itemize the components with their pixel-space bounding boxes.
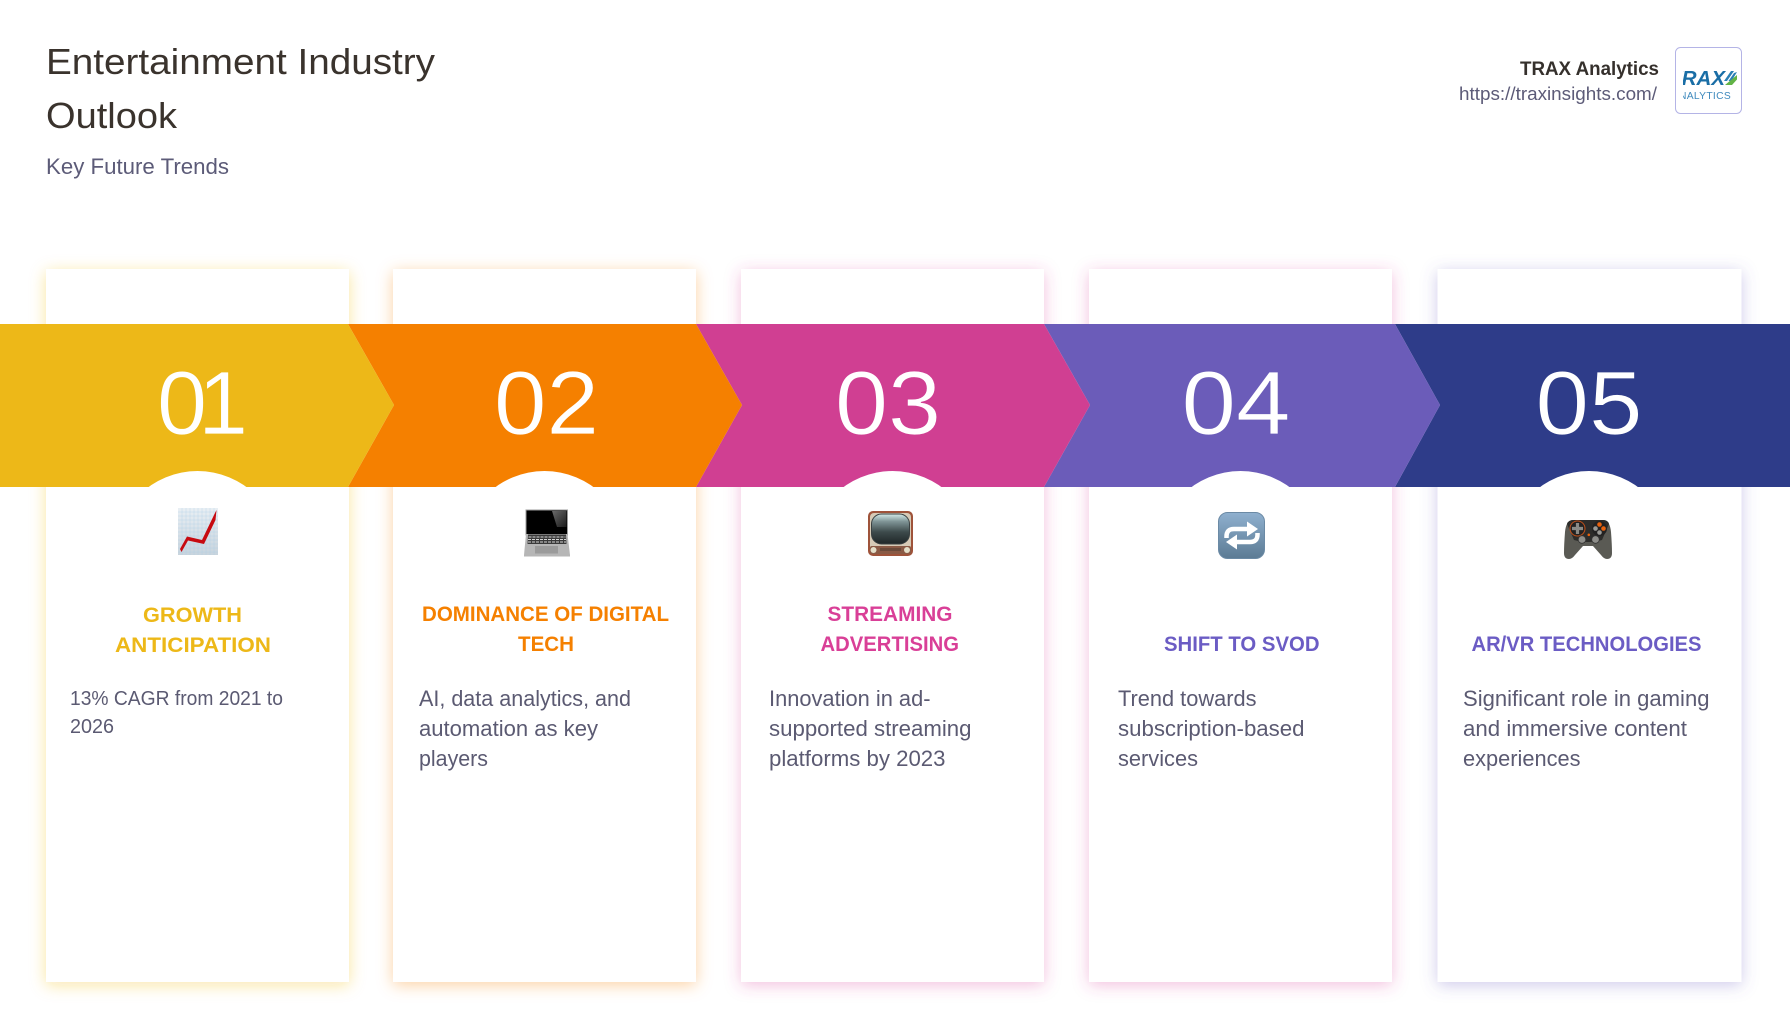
heading: SHIFT TO SVOD (1164, 632, 1320, 656)
panel: card 1 background (46, 269, 349, 982)
icon notch (1158, 471, 1324, 637)
number 01: 01 (157, 354, 248, 454)
description: automation as key (419, 716, 598, 741)
panel: card 5 background (1438, 269, 1742, 982)
subtitle: Key Future Trends (46, 154, 229, 179)
heading (820, 602, 959, 656)
description: and immersive content (1463, 716, 1687, 741)
logo (1669, 48, 1742, 114)
description: platforms by 2023 (769, 746, 946, 771)
chevron 01 (0, 324, 394, 487)
brand url: https://traxinsights.com/ (1459, 83, 1658, 104)
description: Innovation in ad- (769, 686, 930, 711)
description (1463, 686, 1710, 771)
title: Entertainment Industry (46, 41, 435, 82)
heading: AR/VR TECHNOLOGIES (1472, 632, 1702, 656)
description: subscription-based (1118, 716, 1304, 741)
icon notch (114, 471, 280, 637)
description (1118, 686, 1304, 771)
title: Outlook (46, 95, 178, 136)
description: AI, data analytics, and (419, 686, 631, 711)
description (419, 686, 631, 771)
number 04: 04 (1182, 354, 1290, 454)
logo: ANALYTICS (1672, 91, 1731, 102)
icon: video game controller (1564, 520, 1612, 559)
logo: TRAX (1669, 67, 1726, 90)
description: players (419, 746, 488, 771)
panel: card 4 background (1089, 269, 1392, 982)
description: Significant role in gaming (1463, 686, 1710, 711)
heading: STREAMING (828, 602, 952, 626)
description (769, 686, 972, 771)
chevron 03 (696, 324, 1090, 487)
chevron banner (0, 324, 1790, 487)
heading (115, 603, 271, 657)
description: supported streaming (769, 716, 972, 741)
heading: GROWTH (143, 603, 242, 627)
number 02: 02 (494, 354, 599, 454)
heading: ANTICIPATION (115, 633, 271, 657)
panel: card 3 background (741, 269, 1044, 982)
icon: chart increasing (178, 508, 218, 555)
description: 2026 (70, 715, 114, 738)
description: experiences (1463, 746, 1580, 771)
card 3 content (769, 471, 976, 771)
brand block (1459, 48, 1742, 114)
icon: television (868, 511, 913, 556)
description: Trend towards (1118, 686, 1256, 711)
card 1 content (70, 471, 283, 738)
chevron 05 (1395, 324, 1790, 487)
number 05: 05 (1536, 354, 1642, 454)
icon notch (462, 471, 628, 637)
heading: TECH (518, 632, 574, 656)
brand name: TRAX Analytics (1520, 58, 1659, 80)
chevron 04 (1044, 324, 1440, 487)
card 4 content (1118, 471, 1324, 771)
icon notch (1506, 471, 1672, 637)
icon notch (810, 471, 976, 637)
panel: card 2 background (393, 269, 696, 982)
chevron 02 (348, 324, 742, 487)
description: 13% CAGR from 2021 to (70, 687, 283, 710)
icon: laptop (524, 510, 570, 556)
description: services (1118, 746, 1198, 771)
heading: DOMINANCE OF DIGITAL (422, 602, 669, 626)
icon: repeat arrows (1218, 512, 1264, 558)
heading (422, 602, 669, 656)
heading: ADVERTISING (820, 632, 959, 656)
card 2 content (419, 471, 669, 771)
description (70, 687, 283, 738)
number 03: 03 (835, 354, 941, 454)
card 5 content (1463, 471, 1710, 771)
title (46, 41, 435, 136)
